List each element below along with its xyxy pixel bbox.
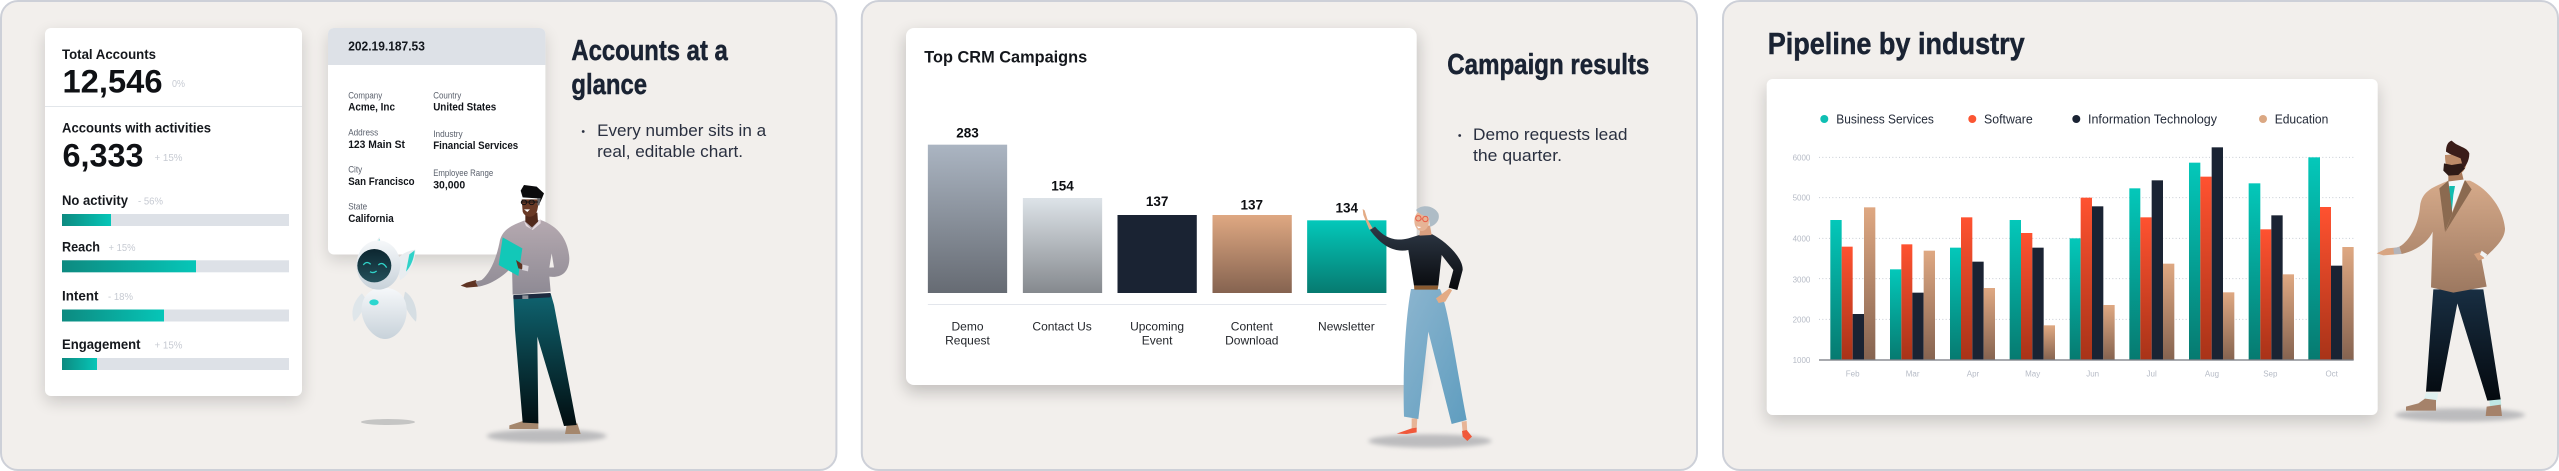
bullet text: editable chart: Every number sits in a: [597, 122, 767, 140]
progress: engagement: [62, 336, 289, 370]
accounts with activities metric: + 15%: [154, 152, 182, 164]
bar chart: Content: [1231, 320, 1273, 334]
bar chart: Upcoming: [1130, 320, 1184, 334]
bar chart: Download: [1225, 334, 1278, 348]
legend: Information Technology: [2088, 112, 2218, 126]
total accounts metric: 0%: [172, 78, 185, 90]
detail fields: Address: [348, 128, 379, 138]
clustered bar chart: 5000: [1793, 194, 1811, 203]
total accounts metric: 12,546: [62, 64, 162, 100]
heading: accounts at a glance: glance: [571, 69, 647, 101]
illustration: man holding folder: [461, 185, 607, 443]
legend: Education: [2275, 112, 2328, 126]
bullet text: editable chart: real, editable chart.: [597, 143, 743, 161]
bar chart: Contact Us: [1032, 320, 1092, 334]
panel: pipeline by industry: [1723, 1, 2558, 470]
legend: Business Services: [1836, 112, 1934, 126]
progress: reach: + 15%: [108, 242, 136, 254]
panel: accounts at a glance: [1, 1, 836, 470]
bar chart: Request: [945, 334, 991, 348]
bullet text: demo requests: [1458, 126, 1628, 165]
accounts with activities metric: 6,333: [62, 138, 144, 174]
clustered bar chart: 1000: [1793, 356, 1811, 365]
clustered bar chart: 6000: [1793, 153, 1811, 162]
ip address: 202.19.187.53: [348, 39, 425, 53]
clustered bar chart: 4000: [1793, 234, 1811, 243]
detail fields: San Francisco: [348, 176, 415, 188]
progress: no activity: [62, 192, 289, 226]
detail fields: Industry: [433, 129, 463, 139]
bar chart: 154: [1051, 179, 1074, 194]
bullet text: demo requests: the quarter.: [1473, 147, 1562, 165]
heading: accounts at a glance: Accounts at a: [571, 35, 729, 67]
clustered bar chart: May: [2025, 369, 2040, 378]
detail fields: Company: [348, 90, 383, 100]
accounts with activities metric: Accounts with activities: [62, 120, 211, 136]
clustered bar chart: Apr: [1967, 369, 1980, 378]
heading: campaign results: Campaign results: [1447, 49, 1649, 81]
progress: no activity: - 56%: [138, 196, 163, 208]
clustered bar chart: Sep: [2263, 369, 2278, 378]
heading: pipeline by industry: Pipeline by industry: [1768, 26, 2025, 61]
bar chart: 137: [1241, 198, 1263, 213]
clustered bar chart: Feb: [1846, 369, 1860, 378]
legend: Software: [1984, 112, 2033, 126]
detail fields: 123 Main St: [348, 139, 405, 151]
detail fields: State: [348, 202, 367, 212]
card: account totals: [45, 28, 302, 402]
progress: intent: [62, 288, 289, 322]
clustered bar chart: Aug: [2205, 369, 2219, 378]
bar chart: Event: [1142, 334, 1173, 348]
detail fields: Acme, Inc: [348, 102, 395, 114]
detail fields: California: [348, 213, 394, 225]
detail fields: City: [348, 164, 363, 174]
bar chart: 137: [1146, 194, 1168, 209]
chart title: Top CRM Campaigns: [924, 47, 1087, 66]
bar chart: [928, 125, 1386, 348]
bar chart: 283: [956, 125, 979, 140]
bar chart: Newsletter: [1318, 320, 1375, 334]
clustered bar chart: Jun: [2086, 369, 2099, 378]
legend: [1820, 112, 2328, 126]
detail fields: United States: [433, 102, 496, 114]
clustered bar chart: Oct: [2325, 369, 2339, 378]
detail fields: Country: [433, 90, 462, 100]
progress: engagement: Engagement: [62, 336, 141, 352]
bullet text: editable chart: [582, 122, 767, 161]
progress: reach: [62, 238, 289, 272]
detail fields: 30,000: [433, 179, 465, 191]
clustered bar chart: 3000: [1793, 275, 1811, 284]
panel: campaign results: [862, 1, 1697, 470]
clustered bar chart: Mar: [1906, 369, 1920, 378]
progress: no activity: No activity: [62, 192, 128, 208]
card: top CRM campaigns chart: [905, 28, 1418, 392]
illustration: woman pointing at chart: [1363, 206, 1492, 448]
accounts with activities metric: [62, 120, 211, 174]
bar chart: 134: [1336, 201, 1359, 216]
progress: reach: Reach: [62, 238, 100, 254]
heading: accounts at a glance: [571, 35, 729, 101]
clustered bar chart: 2000: [1793, 315, 1811, 324]
total accounts metric: Total Accounts: [62, 46, 156, 62]
card: pipeline chart: [1766, 79, 2378, 422]
detail fields: Financial Services: [433, 140, 518, 152]
illustration: robot assistant: [352, 237, 417, 425]
illustration: man in tan jacket presenting: [2377, 141, 2525, 422]
progress: engagement: + 15%: [154, 340, 182, 352]
progress: intent: - 18%: [108, 291, 133, 303]
progress: intent: Intent: [62, 288, 99, 304]
card: account details: [328, 28, 545, 260]
total accounts metric: [62, 46, 185, 100]
detail fields: Employee Range: [433, 168, 493, 178]
clustered bar chart: [1793, 147, 2354, 378]
clustered bar chart: Jul: [2147, 369, 2157, 378]
bullet text: demo requests: Demo requests lead: [1473, 126, 1628, 144]
bar chart: Demo: [951, 320, 984, 334]
detail fields: [348, 90, 518, 225]
